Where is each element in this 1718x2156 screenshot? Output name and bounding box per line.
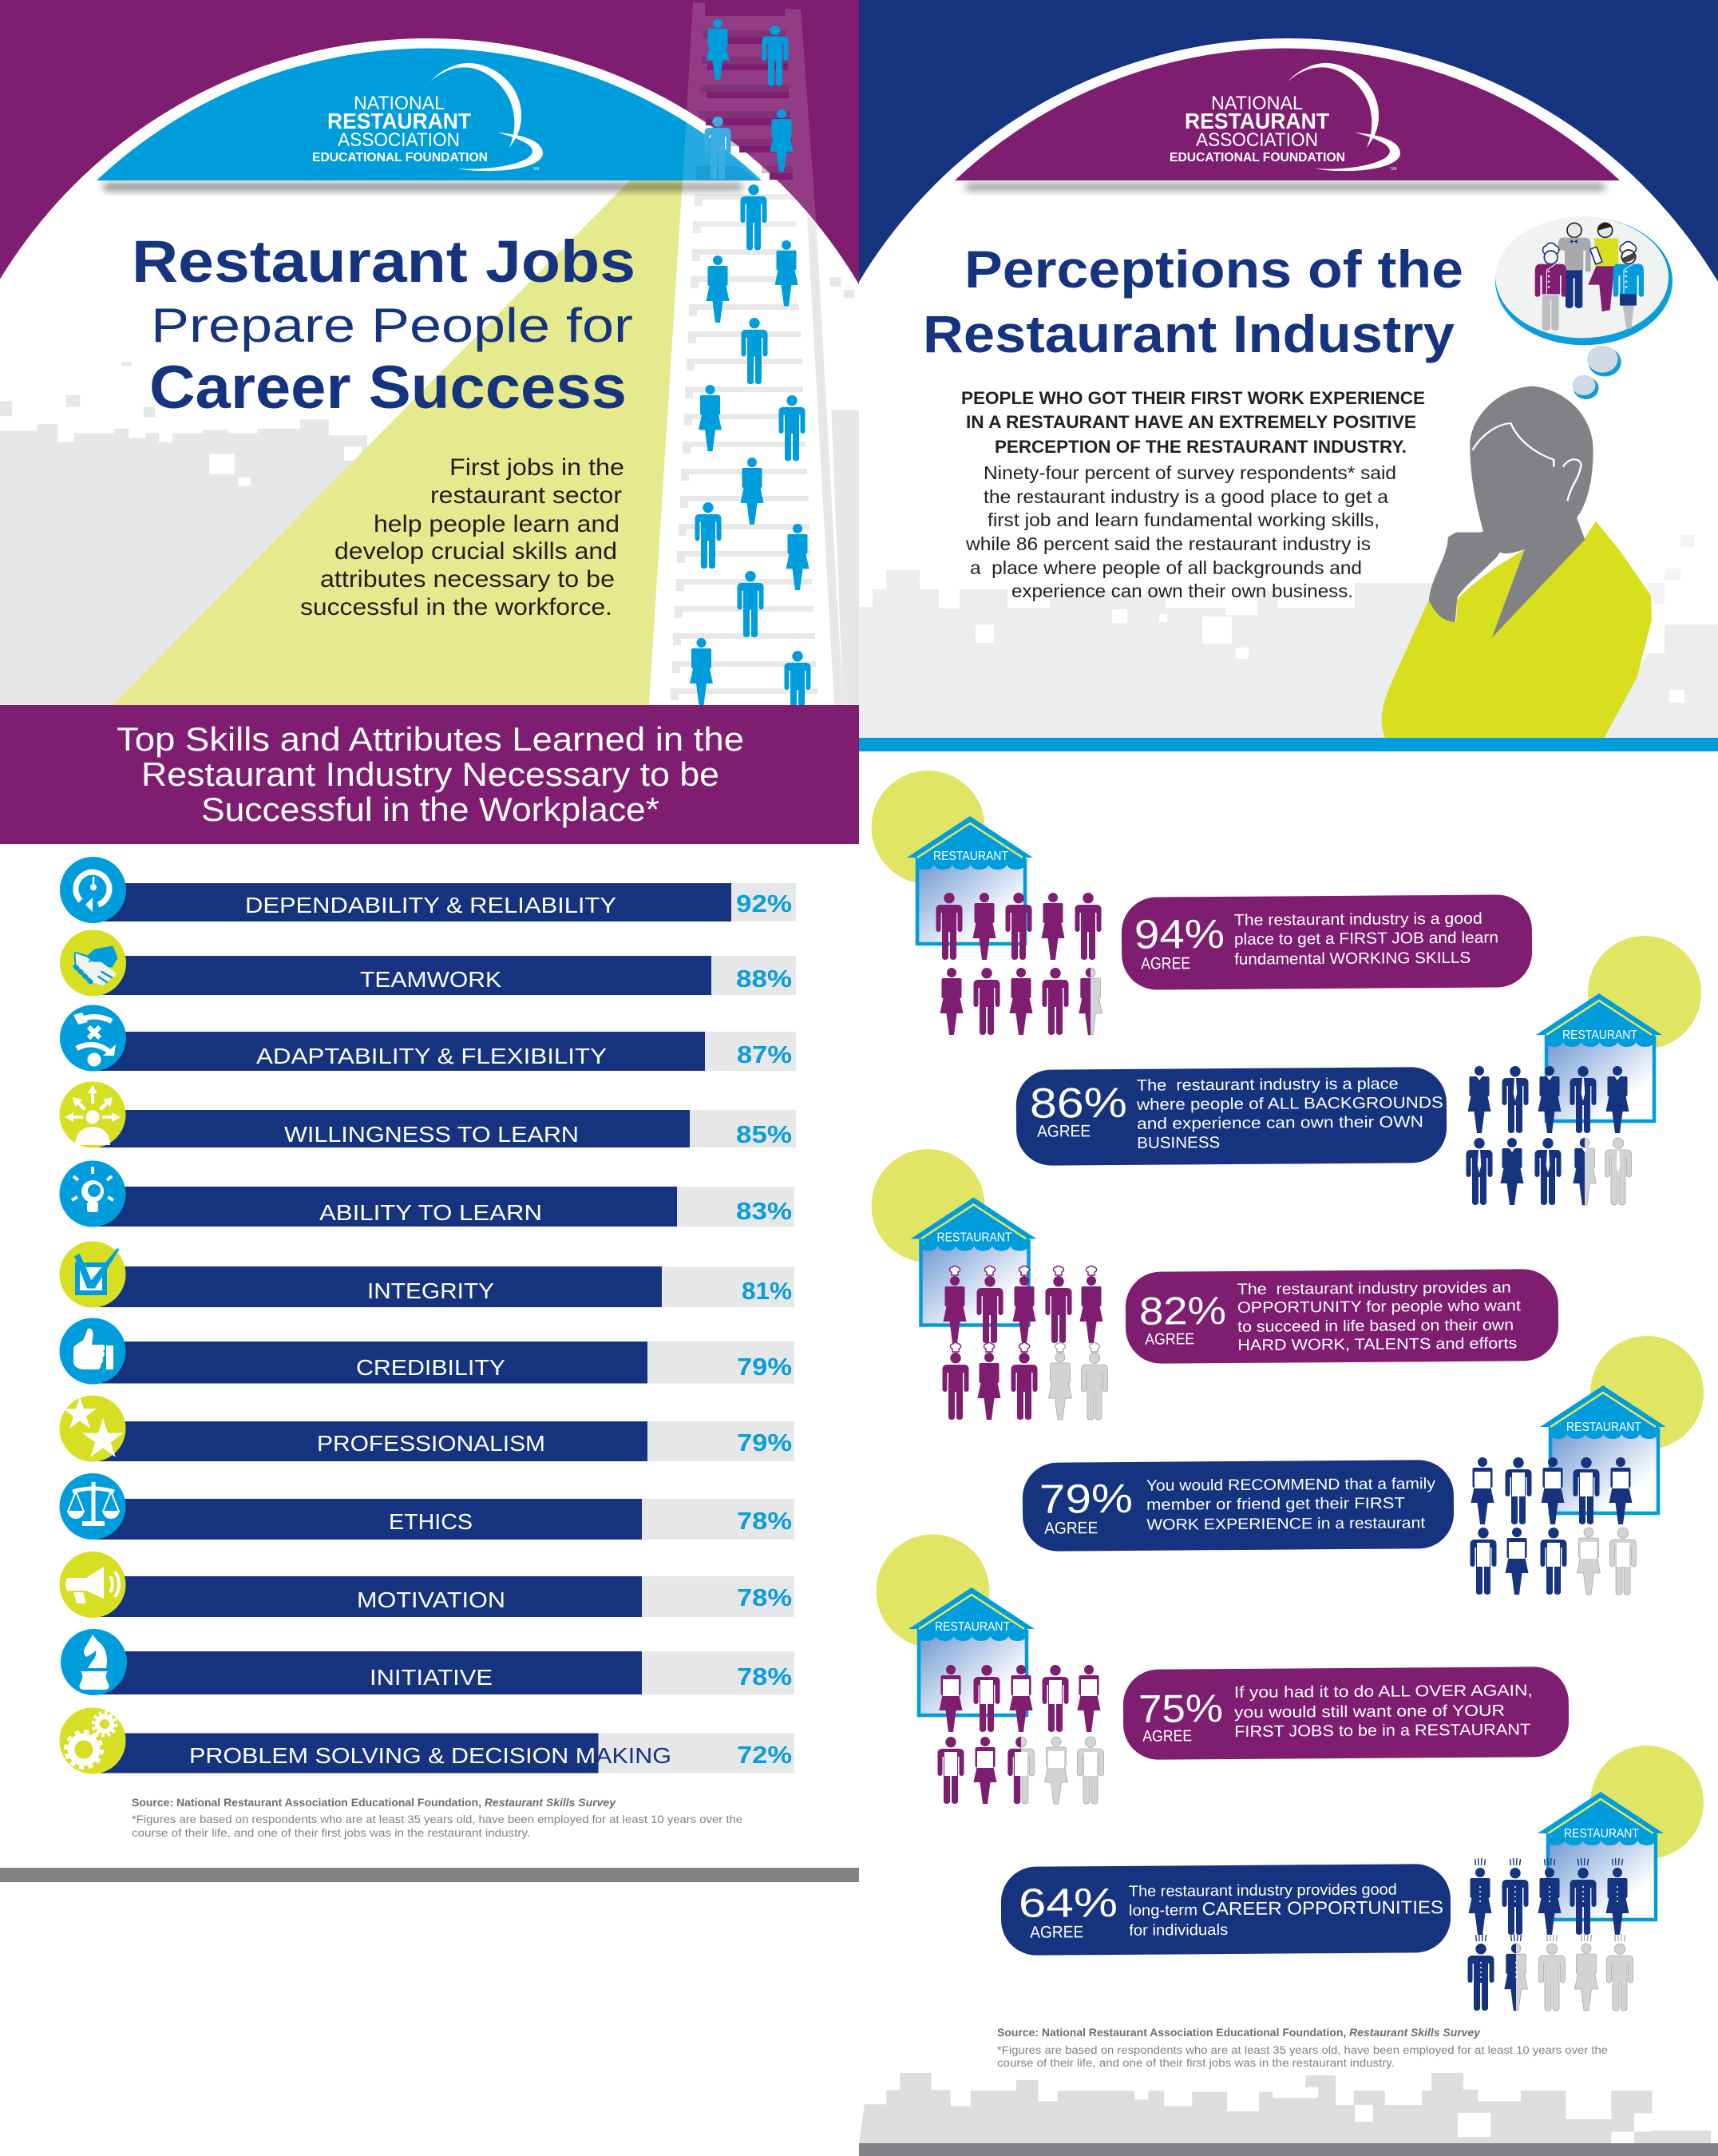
skill bar: willingness to learn bbox=[59, 1081, 796, 1148]
logo wordmark: NATIONAL bbox=[354, 93, 445, 114]
perceptions body text bbox=[965, 462, 1396, 601]
statement pill: long-term CAREER OPPORTUNITIES bbox=[1129, 1896, 1443, 1920]
statement pill: 82% bbox=[1139, 1290, 1226, 1334]
restaurant building: RESTAURANT bbox=[1562, 1028, 1637, 1042]
statement pill bbox=[1126, 1269, 1558, 1364]
statement pill: place to get a FIRST JOB and learn bbox=[1234, 929, 1498, 949]
statement pill: You would RECOMMEND that a family bbox=[1146, 1475, 1435, 1495]
panel: restaurant jobs hero bbox=[0, 0, 859, 705]
skill bar: willingness to learn: 85% bbox=[736, 1120, 792, 1148]
skill bar: motivation: 78% bbox=[737, 1583, 792, 1611]
city skyline background right bbox=[859, 535, 1718, 738]
restaurant building bbox=[1538, 1792, 1664, 1920]
hero intro text: attributes necessary to be bbox=[320, 566, 615, 593]
restaurant building: RESTAURANT bbox=[1564, 1827, 1639, 1841]
logo banner bbox=[97, 49, 762, 190]
people icons bbox=[942, 1266, 1108, 1420]
yellow light beam bbox=[113, 180, 683, 705]
hero intro text: develop crucial skills and bbox=[334, 538, 617, 565]
hero intro text: First jobs in the bbox=[449, 454, 624, 481]
hero intro text: successful in the workforce. bbox=[300, 594, 612, 620]
skill bar: integrity: INTEGRITY bbox=[367, 1278, 494, 1303]
skill bar: dependability and reliability: DEPENDABILITY & RELIABILITY bbox=[245, 893, 616, 917]
statement pill: AGREE bbox=[1145, 1330, 1194, 1349]
perceptions body text: the restaurant industry is a good place to get a bbox=[984, 486, 1389, 507]
statement pill: The restaurant industry provides good bbox=[1129, 1881, 1397, 1900]
left source note: Source: National Restaurant Association Educational Foundation, Restaurant Skills Survey bbox=[132, 1797, 617, 1809]
statement pill: AGREE bbox=[1142, 1727, 1192, 1746]
logo wordmark: SM bbox=[533, 167, 540, 172]
statement pill: FIRST JOBS to be in a RESTAURANT bbox=[1234, 1721, 1530, 1741]
logo wordmark: RESTAURANT bbox=[327, 109, 471, 133]
skill bar: ethics: 78% bbox=[737, 1507, 792, 1535]
statement pill: WORK EXPERIENCE in a restaurant bbox=[1146, 1514, 1426, 1534]
climbing people icons bbox=[690, 19, 811, 718]
perceptions body text: a place where people of all backgrounds and bbox=[970, 557, 1362, 578]
hero title bbox=[132, 228, 635, 422]
lime sun circle bbox=[872, 771, 985, 884]
skill bar: initiative bbox=[61, 1629, 794, 1695]
statement pill: where people of ALL BACKGROUNDS bbox=[1136, 1094, 1443, 1114]
skill bar: ability to learn: ABILITY TO LEARN bbox=[319, 1200, 542, 1225]
hero intro text: help people learn and bbox=[374, 511, 620, 537]
statement pill: OPPORTUNITY for people who want bbox=[1237, 1297, 1522, 1317]
restaurant building: RESTAURANT bbox=[935, 1620, 1010, 1634]
skill bar: professionalism bbox=[59, 1396, 794, 1461]
skill bar: teamwork bbox=[60, 929, 796, 997]
perceptions body text: while 86 percent said the restaurant industry is bbox=[965, 533, 1371, 554]
perceptions bold statement bbox=[961, 388, 1425, 457]
logo wordmark: ASSOCIATION bbox=[338, 129, 460, 151]
statement pill: The restaurant industry provides an bbox=[1237, 1279, 1511, 1298]
skill bar: ethics: ETHICS bbox=[389, 1509, 473, 1534]
logo wordmark right bbox=[1170, 63, 1400, 172]
statement pill: HARD WORK, TALENTS and efforts bbox=[1237, 1334, 1518, 1354]
skill bar: initiative: 78% bbox=[737, 1663, 792, 1690]
skill bar: credibility: CREDIBILITY bbox=[356, 1355, 505, 1380]
restaurant building bbox=[908, 1587, 1035, 1715]
stat row: 64 percent bbox=[1001, 1746, 1704, 2011]
skill bar: ability to learn: 83% bbox=[736, 1197, 792, 1225]
perceptions bold statement: PEOPLE WHO GOT THEIR FIRST WORK EXPERIENCE bbox=[961, 388, 1425, 408]
statement pill: 64% bbox=[1019, 1880, 1118, 1926]
skills heading band bbox=[0, 705, 859, 844]
perceptions body text: experience can own their own business. bbox=[1011, 581, 1353, 601]
hero intro text: restaurant sector bbox=[430, 482, 622, 509]
chef figure blue bbox=[1613, 242, 1644, 329]
skill bar: adaptability and flexibility: 87% bbox=[737, 1040, 792, 1068]
statement pill: fundamental WORKING SKILLS bbox=[1234, 949, 1471, 969]
logo wordmark right: EDUCATIONAL FOUNDATION bbox=[1170, 151, 1345, 164]
right source note: *Figures are based on respondents who are at least 35 years old, have been employed for at least 10 years over the bbox=[997, 2044, 1608, 2056]
perceptions body text: Ninety-four percent of survey respondents* said bbox=[984, 462, 1396, 483]
statement pill: and experience can own their OWN bbox=[1137, 1113, 1423, 1133]
hero intro text bbox=[300, 454, 624, 620]
statement pill: The restaurant industry is a good bbox=[1234, 910, 1482, 929]
skill bar: professionalism: 79% bbox=[737, 1429, 792, 1456]
skill bar: ethics bbox=[59, 1473, 794, 1540]
skills heading band: Successful in the Workplace* bbox=[201, 791, 659, 828]
restaurant building bbox=[907, 816, 1033, 944]
perceptions bold statement: PERCEPTION OF THE RESTAURANT INDUSTRY. bbox=[995, 437, 1407, 457]
skill bar: credibility: 79% bbox=[737, 1353, 792, 1381]
bar chart: skills bbox=[59, 857, 796, 1774]
hero title: Prepare People for bbox=[151, 299, 633, 352]
restaurant building bbox=[1540, 1385, 1666, 1513]
lime sun circle bbox=[1590, 1746, 1704, 1859]
skill bar: problem solving and decision making: 72% bbox=[737, 1741, 792, 1769]
thought bubble dots bbox=[1573, 346, 1621, 399]
skill bar: initiative: INITIATIVE bbox=[370, 1665, 493, 1690]
skill bar: teamwork: TEAMWORK bbox=[360, 967, 501, 992]
thinking person illustration bbox=[1382, 386, 1652, 738]
people icons bbox=[1471, 1457, 1637, 1595]
skill bar: problem solving and decision making bbox=[59, 1707, 794, 1774]
statement pill: you would still want one of YOUR bbox=[1234, 1702, 1505, 1722]
skill bar: problem solving and decision making: PROBLEM SOLVING & DECISION M AKING bbox=[189, 1743, 671, 1768]
logo wordmark right: SM bbox=[1391, 167, 1397, 172]
right source note: course of their life, and one of their first jobs was in the restaurant industry. bbox=[997, 2057, 1395, 2069]
logo banner right bbox=[955, 49, 1620, 190]
people icons bbox=[937, 1665, 1103, 1804]
statement pill bbox=[1001, 1864, 1451, 1956]
stat row: 82 percent bbox=[872, 1149, 1558, 1420]
perceptions body text: first job and learn fundamental working skills, bbox=[988, 509, 1380, 530]
left footer bar bbox=[0, 1868, 859, 1882]
skill bar: adaptability and flexibility: ADAPTABILITY & FLEXIBILITY bbox=[256, 1044, 607, 1068]
skill bar: motivation: MOTIVATION bbox=[357, 1587, 505, 1612]
skills heading band: Restaurant Industry Necessary to be bbox=[141, 755, 719, 793]
logo wordmark: EDUCATIONAL FOUNDATION bbox=[312, 151, 488, 164]
restaurant building: RESTAURANT bbox=[1566, 1421, 1641, 1434]
right footer bar bbox=[859, 2143, 1718, 2156]
people icons bbox=[1467, 1858, 1633, 2011]
statement pill: member or friend get their FIRST bbox=[1146, 1495, 1405, 1514]
hero title: Restaurant Jobs bbox=[132, 228, 635, 295]
panel: perceptions hero bbox=[859, 0, 1718, 738]
statement pill: for individuals bbox=[1129, 1921, 1229, 1940]
restaurant building: RESTAURANT bbox=[933, 850, 1008, 863]
lime sun circle bbox=[872, 1149, 985, 1262]
statement pill: 86% bbox=[1030, 1080, 1127, 1128]
stat row: 94 percent bbox=[872, 771, 1532, 1035]
statement pill: The restaurant industry is a place bbox=[1137, 1076, 1399, 1095]
stat row: 86 percent bbox=[1016, 936, 1701, 1205]
statement pill: AGREE bbox=[1030, 1923, 1083, 1942]
skill bar: ability to learn bbox=[59, 1161, 794, 1227]
skill bar: integrity bbox=[59, 1241, 794, 1308]
stat row: 75 percent bbox=[877, 1535, 1569, 1804]
left source note: course of their life, and one of their first jobs was in the restaurant industry. bbox=[132, 1827, 530, 1839]
right source note: Source: National Restaurant Association Educational Foundation, Restaurant Skills Survey bbox=[997, 2027, 1482, 2039]
logo wordmark bbox=[312, 63, 543, 172]
logo wordmark right: RESTAURANT bbox=[1185, 109, 1329, 133]
statement pill bbox=[1122, 894, 1532, 990]
hero title: Career Success bbox=[149, 354, 627, 422]
skill bar: willingness to learn: WILLINGNESS TO LEARN bbox=[284, 1122, 579, 1147]
skill bar: credibility bbox=[59, 1318, 794, 1385]
perceptions title: Restaurant Industry bbox=[923, 304, 1455, 363]
restaurant building bbox=[910, 1198, 1036, 1326]
skill bar: professionalism: PROFESSIONALISM bbox=[317, 1431, 545, 1456]
restaurant building: RESTAURANT bbox=[937, 1231, 1012, 1244]
statement pill: If you had it to do ALL OVER AGAIN, bbox=[1234, 1682, 1533, 1702]
blue divider band bbox=[859, 738, 1718, 751]
statement pill: 79% bbox=[1039, 1476, 1133, 1522]
staircase bbox=[649, 180, 843, 705]
skill bar: adaptability and flexibility bbox=[60, 1005, 796, 1072]
waiter figure bbox=[1558, 223, 1591, 308]
people icons bbox=[1466, 1066, 1632, 1205]
city skyline background left bbox=[0, 277, 859, 704]
statement pill: AGREE bbox=[1141, 954, 1190, 973]
people icons bbox=[936, 893, 1102, 1035]
bottom city skyline bbox=[859, 2073, 1711, 2143]
perceptions bold statement: IN A RESTAURANT HAVE AN EXTREMELY POSITIVE bbox=[966, 412, 1416, 432]
perceptions title bbox=[923, 240, 1463, 363]
left source note bbox=[132, 1797, 742, 1839]
chef figure purple bbox=[1535, 243, 1566, 331]
server figure bbox=[1588, 223, 1618, 311]
logo wordmark right: NATIONAL bbox=[1211, 93, 1303, 114]
statement pill bbox=[1123, 1667, 1569, 1760]
skill bar: integrity: 81% bbox=[742, 1277, 792, 1305]
restaurant building bbox=[1536, 993, 1662, 1121]
lime sun circle bbox=[877, 1535, 990, 1648]
right source note bbox=[997, 2027, 1608, 2069]
statement pill: BUSINESS bbox=[1137, 1134, 1220, 1152]
thought bubble with staff figures bbox=[1495, 216, 1672, 345]
statement pill: AGREE bbox=[1037, 1122, 1091, 1141]
statement pill: 94% bbox=[1134, 911, 1225, 957]
logo wordmark right: ASSOCIATION bbox=[1196, 129, 1318, 151]
skills heading band: Top Skills and Attributes Learned in the bbox=[117, 720, 744, 758]
skill bar: motivation bbox=[59, 1552, 794, 1618]
translucent ladder over arc bbox=[683, 2, 817, 240]
lime sun circle bbox=[1590, 1336, 1704, 1449]
lime sun circle bbox=[1588, 936, 1701, 1049]
skill bar: teamwork: 88% bbox=[736, 965, 792, 993]
perceptions title: Perceptions of the bbox=[964, 240, 1463, 299]
skill bar: dependability and reliability: 92% bbox=[736, 890, 792, 917]
left source note: *Figures are based on respondents who are at least 35 years old, have been employed for at least 10 years over the bbox=[132, 1813, 742, 1825]
statement pill: AGREE bbox=[1044, 1519, 1098, 1538]
stat row: 79 percent bbox=[1023, 1336, 1704, 1595]
statement pill: 75% bbox=[1138, 1687, 1223, 1731]
statement pill bbox=[1016, 1067, 1447, 1166]
statement pill bbox=[1023, 1460, 1454, 1552]
statement pill: to succeed in life based on their own bbox=[1237, 1316, 1514, 1336]
skill bar: dependability and reliability bbox=[60, 857, 796, 923]
